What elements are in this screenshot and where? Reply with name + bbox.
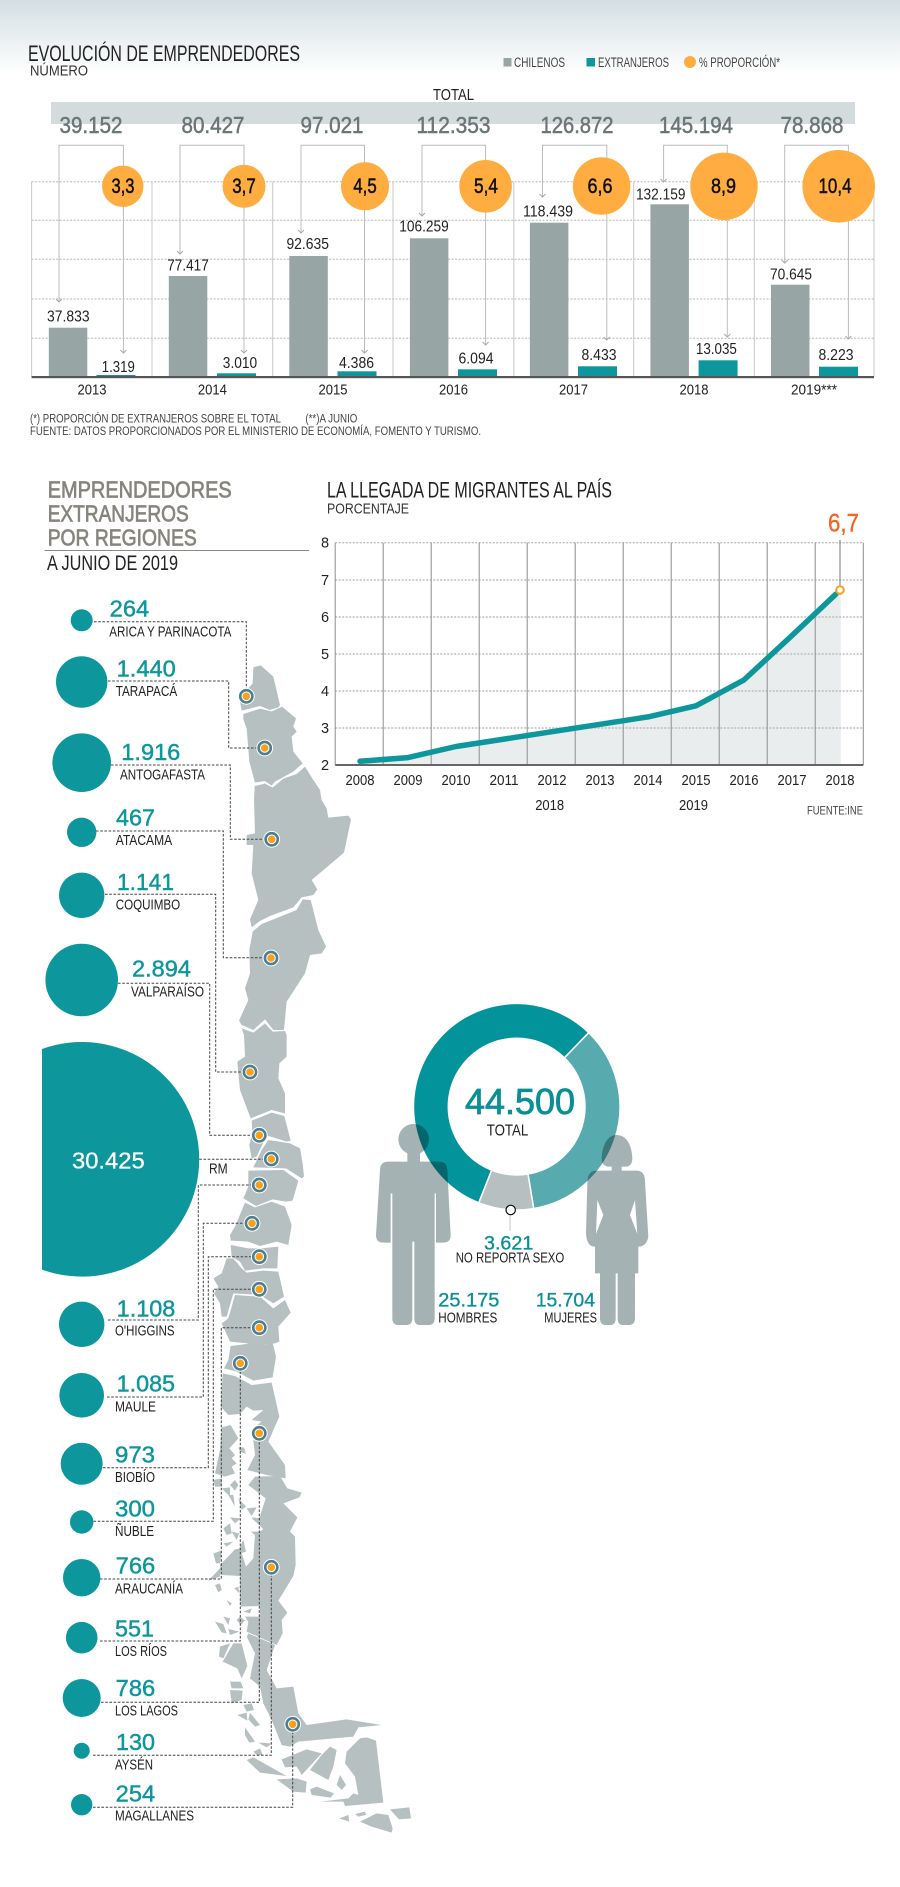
footnotes: FUENTE: DATOS PROPORCIONADOS POR EL MINISTERIO DE ECONOMÍA, FOMENTO Y TURISMO. <box>30 425 481 438</box>
proportion bubbles: 3,3 <box>112 175 134 198</box>
region: Valparaíso <box>45 944 204 1016</box>
callout 6,7 <box>828 510 859 594</box>
region: Aysén: 130 <box>116 1729 155 1755</box>
icon: woman <box>586 1135 648 1325</box>
x axis labels: 2017 <box>778 773 806 789</box>
totals by year: 126.872 <box>540 112 614 138</box>
region: Maule <box>59 1371 175 1418</box>
region: Antofagasta: ANTOGAFASTA <box>120 767 205 783</box>
panel: gender donut <box>376 1003 648 1327</box>
footnotes <box>30 413 481 438</box>
hombres value: HOMBRES <box>438 1311 497 1327</box>
totals by year: 78.868 <box>780 112 844 138</box>
donut total: TOTAL <box>487 1123 529 1140</box>
region: Los Lagos <box>63 1675 178 1720</box>
x axis labels: 2013 <box>586 773 614 789</box>
bars: extranjeros <box>96 360 858 377</box>
x axis labels: 2010 <box>442 773 470 789</box>
year axis labels: 2016 <box>439 382 468 398</box>
region heading: POR REGIONES <box>48 525 197 551</box>
area under line <box>360 590 841 765</box>
icon: man <box>376 1124 451 1325</box>
region: Tarapacá: 1.440 <box>117 656 176 682</box>
map location markers <box>232 688 301 1733</box>
y axis labels: 3 <box>321 721 329 737</box>
bar value labels: 4.386 <box>339 355 374 372</box>
region: Coquimbo <box>59 869 180 918</box>
region: Los Lagos: 786 <box>116 1675 155 1701</box>
y axis labels: 5 <box>321 647 329 663</box>
no reporta sexo callout: 3.621 <box>484 1232 533 1254</box>
region: Araucanía: ARAUCANÍA <box>115 1580 183 1597</box>
axis baseline <box>32 376 874 378</box>
region: Biobío: BIOBÍO <box>115 1469 155 1486</box>
region: Aysén <box>74 1729 155 1773</box>
totals by year <box>60 112 844 138</box>
total heading: TOTAL <box>433 87 474 104</box>
callout 6,7: 6,7 <box>828 510 859 538</box>
region: O'Higgins <box>59 1296 175 1347</box>
x axis labels: 2014 <box>634 773 662 789</box>
no reporta sexo callout: NO REPORTA SEXO <box>456 1251 564 1267</box>
line chart grid <box>335 543 863 766</box>
region: Aysén: AYSÉN <box>115 1756 153 1773</box>
total band <box>51 102 855 124</box>
x axis labels: 2016 <box>730 773 758 789</box>
x axis labels: 2015 <box>682 773 710 789</box>
connector arrows <box>56 145 851 353</box>
no reporta sexo callout <box>456 1205 564 1267</box>
proportion bubbles: 10,4 <box>818 175 852 198</box>
bar value labels: 6.094 <box>458 350 494 367</box>
region heading <box>44 477 309 575</box>
region: Metropolitana: RM <box>209 1161 228 1177</box>
legend <box>504 55 781 70</box>
line chart title: LA LLEGADA DE MIGRANTES AL PAÍS <box>327 477 612 502</box>
region: Tarapacá <box>56 656 177 708</box>
year axis labels: 2017 <box>559 382 588 398</box>
x axis labels <box>346 773 854 814</box>
year axis labels: 2014 <box>198 382 227 398</box>
region: O'Higgins: 1.108 <box>117 1296 175 1322</box>
totals by year: 112.353 <box>416 112 490 138</box>
panel: foreign entrepreneurs by region <box>42 477 411 1833</box>
region: Ñuble <box>70 1496 155 1540</box>
donut total: 44.500 <box>465 1081 575 1122</box>
footnotes: (*) PROPORCIÓN DE EXTRANJEROS SOBRE EL TOTAL <box>30 413 281 426</box>
bar value labels: 1.319 <box>102 359 135 376</box>
region: Antofagasta: 1.916 <box>121 739 180 765</box>
title: EVOLUCIÓN DE EMPRENDEDORES <box>28 41 300 66</box>
region: Maule: 1.085 <box>117 1371 175 1397</box>
proportion bubbles: 4,5 <box>353 175 377 198</box>
mujeres value <box>536 1290 597 1327</box>
y axis labels: 4 <box>321 684 329 700</box>
region: Atacama <box>67 805 172 849</box>
year axis labels: 2015 <box>318 382 348 398</box>
donut chart <box>413 1003 620 1210</box>
year axis labels: 2019*** <box>791 382 837 398</box>
y axis labels: 6 <box>321 610 329 626</box>
mujeres value: MUJERES <box>544 1311 597 1327</box>
legend: % PROPORCIÓN* <box>699 55 781 70</box>
region: Coquimbo: 1.141 <box>117 869 174 895</box>
proportion bubbles: 3,7 <box>232 175 256 198</box>
bar value labels: 118.439 <box>523 204 573 221</box>
region: Atacama: ATACAMA <box>116 833 172 849</box>
totals by year: 39.152 <box>60 112 122 138</box>
y axis labels: 2 <box>321 758 329 774</box>
region: Magallanes: 254 <box>116 1781 155 1807</box>
region: Biobío: 973 <box>115 1442 155 1468</box>
y axis labels: 8 <box>321 536 329 552</box>
region heading: A JUNIO DE 2019 <box>47 552 178 575</box>
migrants line <box>360 594 836 761</box>
bar value labels: 132.159 <box>636 186 686 203</box>
panel: migrant arrivals line chart <box>321 477 863 818</box>
x axis labels: 2012 <box>538 773 566 789</box>
bar value labels: 77.417 <box>167 258 209 275</box>
totals by year: 145.194 <box>659 112 733 138</box>
proportion bubbles: 5,4 <box>474 175 498 198</box>
region: Arica y Parinacota: ARICA Y PARINACOTA <box>109 625 232 641</box>
region: O'Higgins: O'HIGGINS <box>115 1324 174 1340</box>
region: Arica y Parinacota: 264 <box>110 596 149 622</box>
mujeres value: 15.704 <box>536 1290 595 1312</box>
year axis labels: 2013 <box>78 382 106 398</box>
hombres value: 25.175 <box>438 1290 499 1312</box>
proportion bubbles <box>102 150 875 223</box>
region: Magallanes <box>71 1781 194 1825</box>
totals by year: 80.427 <box>182 112 244 138</box>
region: Ñuble: ÑUBLE <box>115 1523 154 1540</box>
x axis labels: 2008 <box>346 773 374 789</box>
region: Los Ríos <box>66 1616 167 1660</box>
leader lines <box>93 622 293 1807</box>
region: Araucanía: 766 <box>116 1553 155 1579</box>
region: Antofagasta <box>52 733 205 792</box>
x axis labels: 2018 <box>535 798 564 814</box>
x axis labels: 2018 <box>826 773 854 789</box>
x axis labels: 2011 <box>490 773 518 789</box>
region: Tarapacá: TARAPACÁ <box>116 683 177 700</box>
year axis labels: 2018 <box>680 382 708 398</box>
totals by year: 97.021 <box>300 112 364 138</box>
chart grid <box>32 182 874 377</box>
region: Araucanía <box>63 1553 183 1597</box>
line chart subtitle: PORCENTAJE <box>327 501 409 517</box>
bar value labels: 37.833 <box>47 309 90 326</box>
donut total <box>465 1081 575 1140</box>
bars: chilenos <box>49 204 810 377</box>
region heading: EXTRANJEROS <box>48 501 189 527</box>
bar value labels: 13.035 <box>696 341 737 358</box>
y axis labels: 7 <box>321 573 329 589</box>
region: Los Ríos: LOS RÍOS <box>115 1643 167 1660</box>
footnotes: (**)A JUNIO <box>305 414 357 426</box>
x axis labels: 2019 <box>679 798 708 814</box>
year axis labels <box>78 382 837 398</box>
source: FUENTE:INE <box>807 806 863 818</box>
hombres value <box>438 1290 499 1327</box>
region: Metropolitana <box>42 1042 228 1277</box>
proportion bubbles: 8,9 <box>711 175 736 198</box>
bar value labels: 92.635 <box>286 236 329 253</box>
x axis labels: 2009 <box>394 773 422 789</box>
panel: evolution of entrepreneurs bar chart <box>28 41 875 438</box>
bar value labels: 8.433 <box>582 347 617 364</box>
legend: EXTRANJEROS <box>598 55 669 70</box>
region: Ñuble: 300 <box>115 1496 155 1522</box>
bar value labels: 70.645 <box>770 266 812 283</box>
subtitle: NÚMERO <box>30 62 88 80</box>
region: Maule: MAULE <box>115 1399 156 1415</box>
bar value labels: 8.223 <box>818 347 854 364</box>
legend: CHILENOS <box>514 55 565 70</box>
region: Metropolitana: 30.425 <box>72 1147 145 1173</box>
map of Chile <box>208 665 411 1833</box>
region: Valparaíso: 2.894 <box>132 956 191 982</box>
region heading: EMPRENDEDORES <box>48 477 232 503</box>
region: Atacama: 467 <box>116 805 155 831</box>
region: Magallanes: MAGALLANES <box>115 1809 194 1825</box>
region: Arica y Parinacota <box>71 596 232 641</box>
bar value labels: 3.010 <box>223 355 257 372</box>
bar value labels <box>47 186 854 376</box>
region: Biobío <box>61 1442 155 1486</box>
region: Coquimbo: COQUIMBO <box>116 897 180 913</box>
region: Los Ríos: 551 <box>115 1616 154 1642</box>
y axis labels <box>321 536 329 774</box>
proportion bubbles: 6,6 <box>588 175 612 198</box>
region: Los Lagos: LOS LAGOS <box>115 1704 178 1720</box>
region: Valparaíso: VALPARAÍSO <box>131 984 204 1001</box>
bar value labels: 106.259 <box>399 219 449 236</box>
